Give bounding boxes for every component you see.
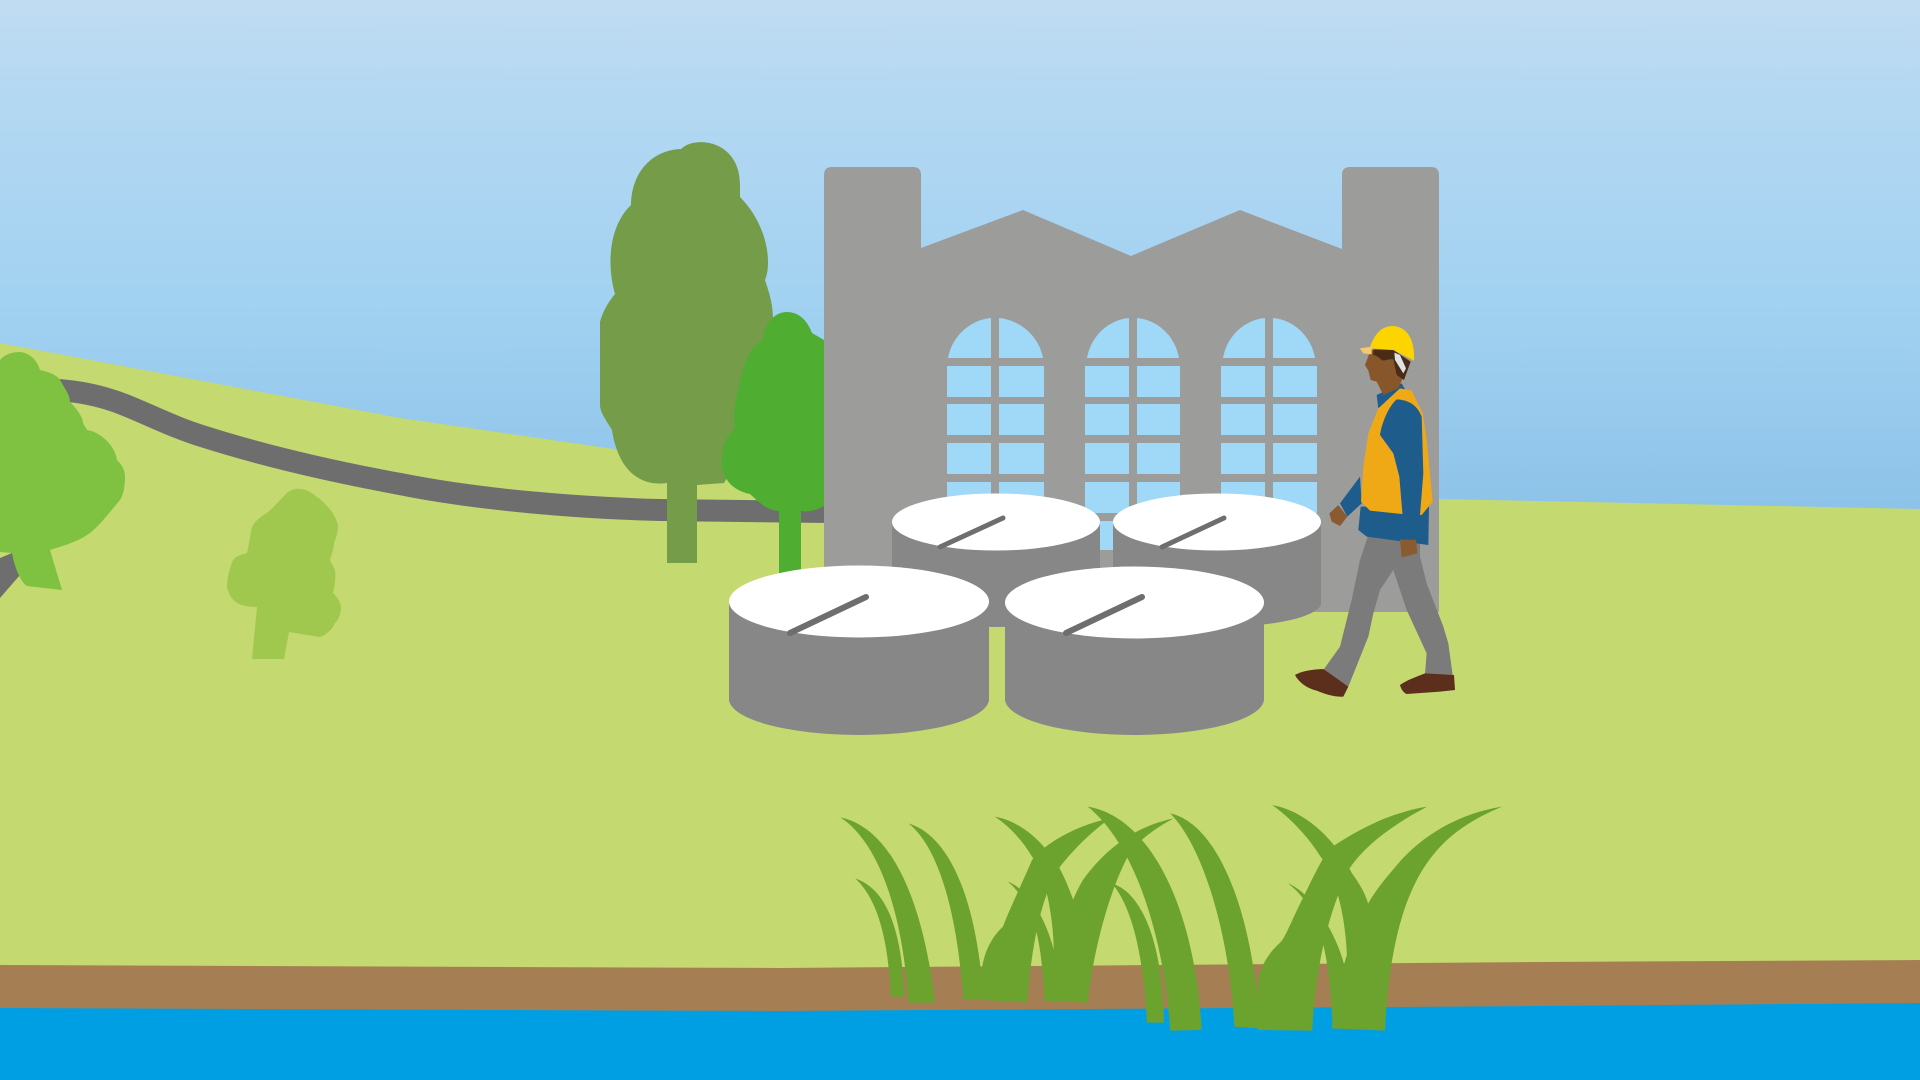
head [1365, 350, 1403, 395]
tank: front left [729, 566, 989, 735]
river water [0, 1003, 1920, 1080]
safety vest [1361, 388, 1433, 515]
factory building [824, 167, 1439, 612]
jacket sleeve [1380, 399, 1423, 517]
hands [1329, 505, 1417, 557]
tree: bright green [722, 312, 824, 575]
factory windows [947, 318, 1317, 550]
window left [947, 318, 1044, 513]
helmet [1370, 326, 1414, 361]
reeds in foreground [841, 805, 1502, 1031]
worker in hard hat and safety vest [1295, 326, 1455, 697]
tree: light green small [227, 489, 341, 659]
tank: back right [1113, 494, 1321, 627]
riverbank [0, 960, 1920, 1015]
window centre [1085, 318, 1180, 550]
helmet brim [1360, 347, 1372, 354]
helmet strap [1394, 353, 1406, 373]
left reed cluster [841, 817, 1174, 1003]
sky background [0, 0, 1920, 520]
window right [1221, 318, 1317, 513]
tree: large olive [600, 142, 773, 563]
boots [1295, 669, 1455, 697]
jacket [1340, 383, 1429, 545]
tank: back left [892, 494, 1100, 627]
trousers [1323, 535, 1453, 687]
grassy hill and field [0, 343, 1920, 1080]
road winding over the hill [0, 389, 830, 598]
tank: front right [1005, 566, 1264, 735]
right reed cluster [1257, 805, 1502, 1031]
hair [1373, 349, 1411, 380]
tree: mid green left [0, 352, 125, 590]
centre reed cluster [1088, 807, 1260, 1031]
